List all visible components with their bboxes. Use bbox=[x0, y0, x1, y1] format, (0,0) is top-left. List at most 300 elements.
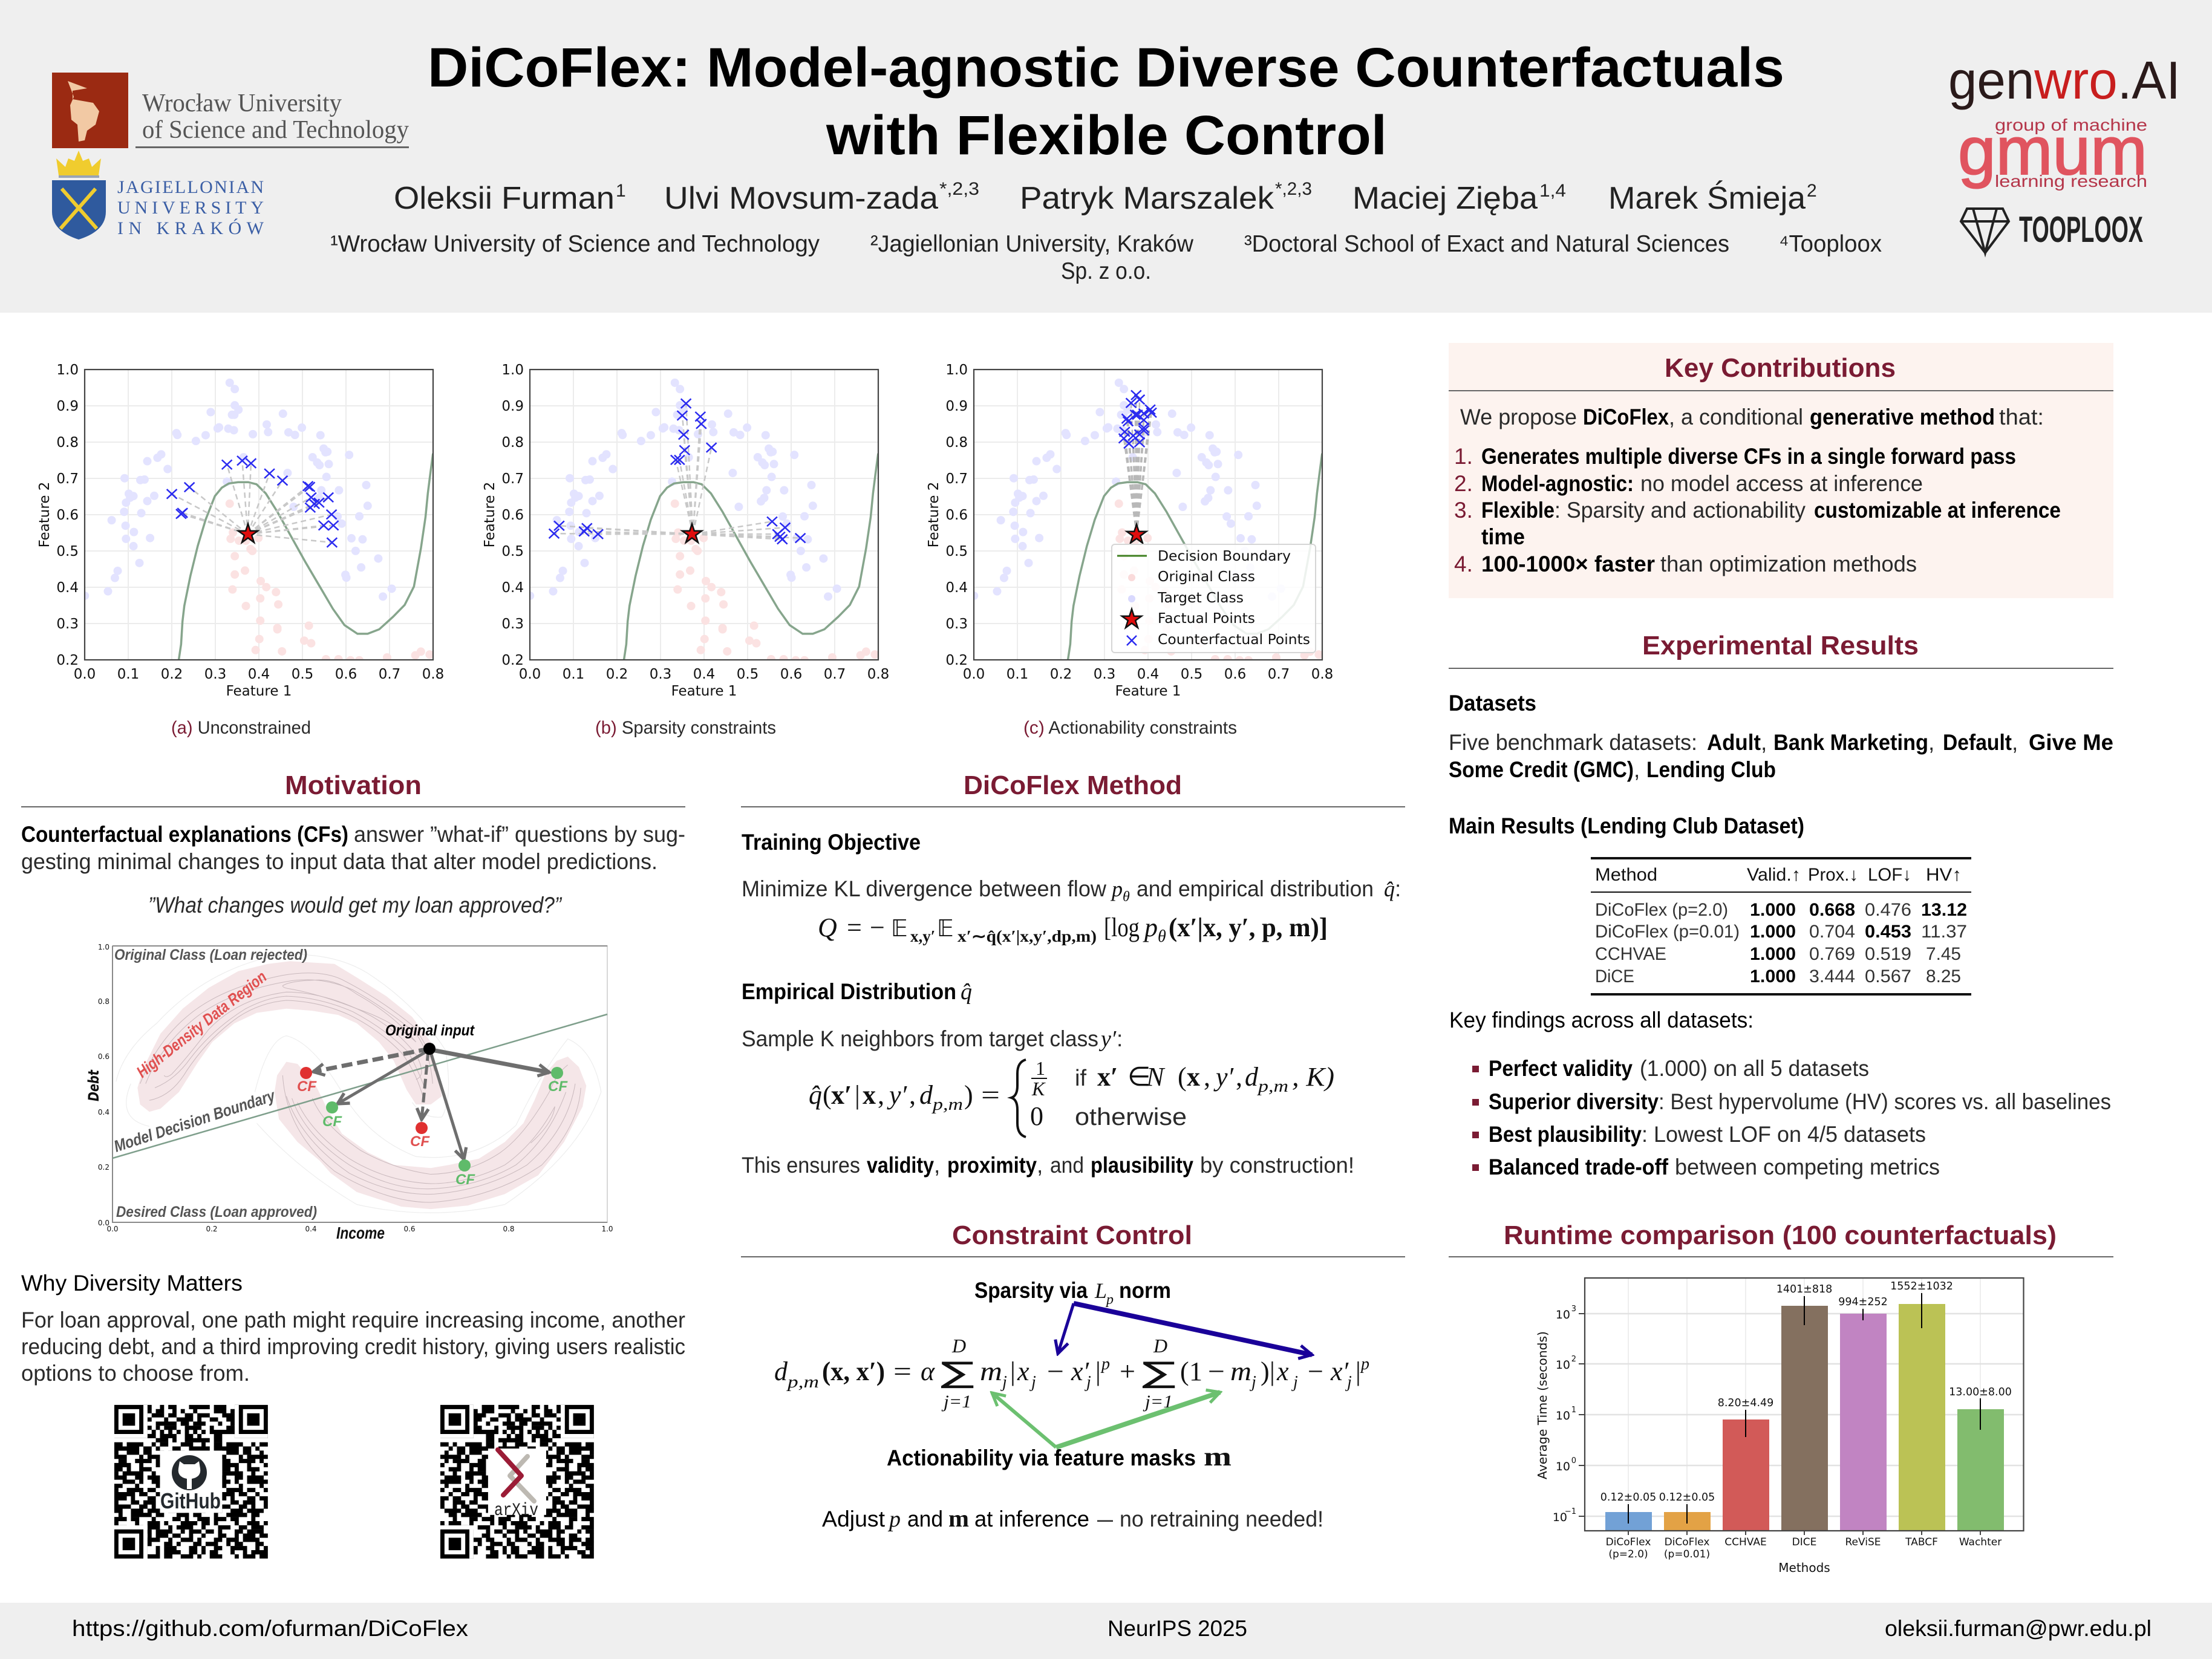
heading: runtime comparison: Runtime comparison (100 counterfactuals) bbox=[1504, 1221, 2057, 1250]
equation: empirical distribution: p,m bbox=[1257, 1077, 1288, 1096]
text block: ensures: This ensures bbox=[742, 1153, 860, 1178]
equation: objective: 𝔼 bbox=[891, 915, 908, 942]
figure: scatter plot (a) unconstrained: 1.0 bbox=[56, 362, 79, 378]
equation: distance: p bbox=[1360, 1355, 1369, 1374]
heading: experimental results: Experimental Results bbox=[1642, 631, 1919, 660]
arrows: sparsity bbox=[1058, 1303, 1312, 1355]
equation: empirical distribution: x bbox=[863, 1080, 876, 1110]
text block: ensures: validity bbox=[867, 1153, 934, 1178]
category labels: ReViSE bbox=[1845, 1536, 1881, 1548]
text block: we propose: DiCoFlex bbox=[1583, 405, 1669, 429]
equation: empirical distribution: d bbox=[1245, 1062, 1259, 1092]
figure: loan decision illustration: Original input bbox=[385, 1022, 475, 1039]
figure: scatter plot (a) unconstrained: Feature 2 bbox=[37, 482, 53, 547]
figure: loan decision illustration: Desired Class (Loan approved) bbox=[116, 1204, 317, 1221]
results table: Method bbox=[1595, 865, 1657, 885]
figure: loan decision illustration: 0.4 bbox=[98, 1108, 109, 1116]
text block: we propose: that: bbox=[1999, 405, 2044, 429]
equation: distance: x′ bbox=[1071, 1357, 1090, 1386]
axis tick labels (b): 0.4 bbox=[693, 667, 715, 682]
equation: empirical distribution: N bbox=[1146, 1062, 1166, 1092]
equation: empirical distribution: d bbox=[919, 1080, 933, 1110]
bar chart: average time: 10 bbox=[1553, 1511, 1567, 1524]
text block: adjust at inference: Adjust bbox=[822, 1507, 886, 1531]
text block: CF definition: Counterfactual explanations (CFs) bbox=[21, 822, 348, 847]
text block: datasets: Lending Club bbox=[1646, 757, 1776, 782]
category labels: Wachter bbox=[1959, 1536, 2002, 1548]
bullet list: findings: Best plausibility bbox=[1489, 1122, 1642, 1147]
bar chart: average time: 3 bbox=[1571, 1305, 1576, 1314]
equation: objective: θ bbox=[1158, 927, 1166, 946]
figure: loan decision illustration: 0.8 bbox=[98, 997, 109, 1006]
equation: distance: j=1 bbox=[941, 1392, 971, 1412]
numbered list: than optimization methods bbox=[1660, 552, 1917, 576]
logo: Jagiellonian University: JAGIELLONIAN bbox=[117, 177, 264, 197]
category labels: DICE bbox=[1792, 1536, 1816, 1548]
figure: scatter plot (a) unconstrained bbox=[37, 362, 444, 699]
figure: loan decision illustration: High-Density Data Region bbox=[133, 968, 270, 1081]
bar chart: average time: 0 bbox=[1571, 1456, 1576, 1465]
logo: gmum: gmum bbox=[1958, 113, 2147, 189]
axis tick labels (c): 0.8 bbox=[1311, 667, 1333, 682]
axis tick labels (c): 0.6 bbox=[1224, 667, 1246, 682]
equation: distance: j bbox=[1000, 1373, 1007, 1392]
label: sparsity: L bbox=[1094, 1279, 1107, 1303]
QR code: GitHub: GitHub bbox=[160, 1488, 221, 1513]
figure: loan decision illustration: Debt bbox=[85, 1069, 102, 1101]
axis labels: Methods bbox=[1778, 1560, 1830, 1575]
axis tick labels (a): 0.6 bbox=[335, 667, 357, 682]
text block: ensures: plausibility bbox=[1091, 1153, 1193, 1178]
results table: 0.769 bbox=[1809, 944, 1855, 964]
footer band: https://github.com/ofurman/DiCoFlex bbox=[72, 1616, 469, 1641]
annotations: Original Class (Loan rejected) bbox=[114, 947, 307, 963]
subheading: training objective: Training Objective bbox=[742, 830, 921, 855]
axis tick labels (b): 0.5 bbox=[737, 667, 759, 682]
figure: loan decision illustration: CF bbox=[455, 1172, 475, 1188]
figure: loan decision illustration bbox=[85, 943, 613, 1242]
counterfactual links and points (b) bbox=[549, 399, 806, 544]
points and CF labels bbox=[423, 1043, 436, 1055]
figure: loan decision illustration: CF bbox=[410, 1133, 430, 1150]
authors: 1 bbox=[616, 181, 626, 201]
text block: sample neighbors: Sample K neighbors from target class bbox=[742, 1026, 1098, 1051]
title: with Flexible Control bbox=[826, 105, 1387, 166]
caption (a): (a) Unconstrained bbox=[171, 718, 311, 738]
results table: 8.25 bbox=[1926, 966, 1961, 986]
category labels: CCHVAE bbox=[1724, 1536, 1767, 1548]
numbered list: 4. bbox=[1454, 552, 1473, 576]
figure: loan decision illustration: CF bbox=[548, 1078, 568, 1095]
equation: empirical distribution: ( bbox=[823, 1080, 832, 1110]
title bbox=[428, 37, 1784, 166]
affiliations: ³Doctoral School of Exact and Natural Sciences bbox=[1244, 231, 1729, 257]
results table: 13.12 bbox=[1921, 900, 1967, 920]
bullet list: findings: (1.000) on all 5 datasets bbox=[1640, 1056, 1869, 1081]
text block: adjust at inference: m bbox=[948, 1505, 969, 1532]
QR code: GitHub bbox=[114, 1405, 268, 1559]
text block: KL divergence: p bbox=[1110, 877, 1123, 901]
figure: scatter plot (c) actionability constraints bbox=[926, 362, 1333, 699]
figure: loan decision illustration: Model Decision Boundary bbox=[112, 1086, 278, 1156]
figure: loan decision illustration: Income bbox=[336, 1224, 385, 1242]
equation: empirical distribution bbox=[809, 1057, 1334, 1137]
footer band: oleksii.furman@pwr.edu.pl bbox=[1885, 1616, 2152, 1641]
results table: 0.476 bbox=[1865, 900, 1911, 920]
results table: Prox.↓ bbox=[1808, 865, 1858, 885]
logo: Tooploox bbox=[1961, 209, 2143, 253]
figure: scatter plot (b) sparsity constraints: 0.7 bbox=[501, 471, 524, 487]
authors: Patryk Marszalek bbox=[1020, 181, 1274, 216]
numbered list bbox=[1454, 444, 2061, 576]
subheading: datasets: Datasets bbox=[1449, 691, 1536, 715]
axis tick labels (a): 0.7 bbox=[379, 667, 400, 682]
logo: Wroclaw University of Science and Technology: Wrocław University bbox=[142, 90, 342, 117]
logo: Wroclaw University of Science and Technology bbox=[52, 73, 409, 148]
logo: Jagiellonian University: IN KRAKÓW bbox=[117, 218, 264, 238]
figure: scatter plot (a) unconstrained: 0.8 bbox=[56, 435, 79, 451]
figure: scatter plot (b) sparsity constraints: 0.3 bbox=[501, 616, 524, 632]
footer band bbox=[0, 1603, 2212, 1659]
text block: KL divergence: θ bbox=[1123, 889, 1130, 905]
equation: objective: p bbox=[1143, 913, 1158, 942]
title: DiCoFlex: Model-agnostic Diverse Counterfactuals bbox=[428, 37, 1784, 99]
figure: scatter plot (b) sparsity constraints: Feature 1 bbox=[671, 683, 737, 699]
equation: distance: | bbox=[1356, 1357, 1361, 1386]
heading: motivation: Motivation bbox=[285, 771, 422, 800]
bars bbox=[1605, 1304, 2004, 1531]
axis tick labels (a): 0.4 bbox=[248, 667, 270, 682]
equation: distance: m bbox=[1230, 1357, 1251, 1386]
axis tick labels (a): 0.8 bbox=[422, 667, 444, 682]
bar chart: average time: 2 bbox=[1571, 1355, 1576, 1364]
results table: 0.704 bbox=[1809, 922, 1855, 942]
figure: scatter plot (b) sparsity constraints: Feature 2 bbox=[482, 482, 498, 547]
equation: distance: j bbox=[1291, 1373, 1298, 1392]
equation: empirical distribution: , bbox=[909, 1080, 916, 1110]
results table: 0.567 bbox=[1865, 966, 1911, 986]
authors: Ulvi Movsum-zada bbox=[664, 181, 938, 216]
equation: distance: p,m bbox=[786, 1373, 819, 1392]
axis tick labels (a): 0.1 bbox=[117, 667, 139, 682]
equation: distance: ( bbox=[1180, 1357, 1189, 1386]
equation: distance: p bbox=[1100, 1355, 1110, 1374]
figure: scatter plot (a) unconstrained: 0.6 bbox=[56, 507, 79, 523]
axis tick labels (b): 0.1 bbox=[563, 667, 584, 682]
quote: ”What changes would get my loan approved?” bbox=[148, 893, 563, 918]
heading: key contributions: Key Contributions bbox=[1665, 353, 1896, 383]
numbered list: 100-1000× faster bbox=[1481, 552, 1655, 576]
figure: loan decision illustration: 0.2 bbox=[98, 1163, 109, 1172]
logo: Jagiellonian University bbox=[52, 151, 264, 240]
text block: datasets: , bbox=[1928, 730, 1934, 755]
equation: distance: x bbox=[1017, 1357, 1029, 1386]
tick labels: 0.6 bbox=[403, 1225, 416, 1233]
equation: empirical distribution: , K) bbox=[1292, 1062, 1334, 1092]
category labels: DiCoFlex bbox=[1606, 1536, 1651, 1548]
equation: empirical distribution: ( bbox=[1178, 1062, 1187, 1092]
arrows from original input bbox=[313, 1049, 549, 1159]
tick labels: 0.4 bbox=[305, 1225, 317, 1233]
counterfactual links and points (c) bbox=[1119, 390, 1157, 535]
panel: experimental results bbox=[1449, 631, 2113, 1179]
equation: empirical distribution: x′ bbox=[831, 1080, 852, 1110]
equation: distance: D bbox=[1153, 1335, 1167, 1357]
text block: diversity: options to choose from. bbox=[21, 1361, 250, 1386]
results table: 0.668 bbox=[1809, 900, 1855, 920]
text block: ensures: , bbox=[1037, 1153, 1043, 1178]
equation: distance: + bbox=[1120, 1357, 1135, 1386]
figure: scatter plot (c) actionability constraints: 0.9 bbox=[945, 399, 968, 414]
caption (c): (c) Actionability constraints bbox=[1023, 718, 1237, 738]
figure: scatter plot (b) sparsity constraints: 0.4 bbox=[501, 580, 524, 596]
numbered list: customizable at inference bbox=[1814, 498, 2061, 523]
numbered list: Model-agnostic: bbox=[1481, 471, 1634, 496]
text block: KL divergence: : bbox=[1395, 876, 1401, 901]
text block: datasets: , bbox=[1634, 757, 1640, 782]
figure: scatter plot (c) actionability constraints: 0.4 bbox=[945, 580, 968, 596]
results table: Valid.↑ bbox=[1747, 865, 1801, 885]
heading: method: DiCoFlex Method bbox=[964, 771, 1182, 800]
equation: empirical distribution: , bbox=[1204, 1062, 1210, 1092]
category labels: (p=2.0) bbox=[1608, 1548, 1648, 1560]
numbered list: time bbox=[1481, 524, 1525, 549]
value labels: 8.20±4.49 bbox=[1718, 1397, 1773, 1409]
legend bbox=[1112, 544, 1316, 653]
bar chart: average time: 10 bbox=[1556, 1308, 1570, 1322]
bar chart: average time: 10 bbox=[1556, 1460, 1570, 1473]
authors: Maciej Zięba bbox=[1352, 181, 1538, 216]
authors: 1,4 bbox=[1539, 181, 1566, 201]
text block: datasets: Bank Marketing bbox=[1773, 730, 1928, 755]
footer band: NeurIPS 2025 bbox=[1108, 1616, 1247, 1641]
text block: adjust at inference: at inference bbox=[974, 1507, 1089, 1531]
text block: sample neighbors: : bbox=[1117, 1026, 1123, 1051]
numbered list: Generates multiple diverse CFs in a single forward pass bbox=[1481, 444, 2016, 469]
equation: objective: Q bbox=[818, 913, 837, 942]
text block: sample neighbors: y′ bbox=[1098, 1026, 1117, 1052]
equation: distance: | bbox=[1270, 1357, 1275, 1386]
panel: DiCoFlex method bbox=[741, 771, 1405, 1178]
equation: distance: α bbox=[921, 1357, 935, 1386]
equation: empirical distribution: | bbox=[855, 1080, 860, 1110]
subheading: empirical distribution: q̂ bbox=[961, 979, 972, 1005]
text block: datasets: Some Credit (GMC) bbox=[1449, 757, 1634, 782]
equation: empirical distribution: 0 bbox=[1030, 1101, 1043, 1131]
label: sparsity: p bbox=[1105, 1292, 1114, 1308]
axis tick labels (c): 0.0 bbox=[963, 667, 985, 682]
figure: loan decision illustration: 1.0 bbox=[98, 943, 109, 951]
figure: scatter plot (a) unconstrained: 0.5 bbox=[56, 544, 79, 559]
caption (b): (b) Sparsity constraints bbox=[595, 718, 776, 738]
figure: scatter plot (c) actionability constraints: 1.0 bbox=[945, 362, 968, 378]
text block: KL divergence: Minimize KL divergence between flow bbox=[742, 876, 1106, 901]
results table: HV↑ bbox=[1926, 865, 1962, 885]
numbered list: 3. bbox=[1454, 498, 1473, 523]
text block: ensures: proximity bbox=[947, 1153, 1037, 1178]
text block: diversity: For loan approval, one path might require increasing income, another bbox=[21, 1308, 685, 1332]
axis tick labels (c): 0.7 bbox=[1268, 667, 1290, 682]
label: sparsity: Sparsity via bbox=[974, 1278, 1088, 1303]
category labels: (p=0.01) bbox=[1664, 1548, 1710, 1560]
results table: 1.000 bbox=[1750, 966, 1796, 986]
equation: empirical distribution: 1 bbox=[1036, 1057, 1045, 1079]
equation: distance: x bbox=[1276, 1357, 1289, 1386]
authors: 2 bbox=[1807, 181, 1817, 201]
authors: *,2,3 bbox=[1275, 179, 1312, 199]
affiliations: ⁴Tooploox bbox=[1779, 231, 1882, 257]
axis tick labels (c): 0.2 bbox=[1050, 667, 1072, 682]
equation: objective: [log bbox=[1104, 913, 1140, 942]
label: actionability: m bbox=[1204, 1442, 1232, 1472]
authors: Marek Śmieja bbox=[1608, 180, 1806, 216]
arrows: actionability bbox=[992, 1392, 1220, 1447]
figure: scatter plot (c) actionability constraints: Feature 2 bbox=[926, 482, 942, 547]
results table: 7.45 bbox=[1926, 944, 1961, 964]
equation: distance: j bbox=[1345, 1373, 1352, 1392]
bullet list: findings: : Lowest LOF on 4/5 datasets bbox=[1642, 1122, 1926, 1147]
text block: adjust at inference: — bbox=[1097, 1507, 1113, 1531]
figure: scatter plot (a) unconstrained: 0.3 bbox=[56, 616, 79, 632]
text block: datasets: Five benchmark datasets: bbox=[1449, 730, 1697, 755]
value labels: 1552±1032 bbox=[1890, 1280, 1953, 1292]
text block: datasets: Default bbox=[1943, 730, 2012, 755]
figure: scatter plot (a) unconstrained: 0.9 bbox=[56, 399, 79, 414]
equation: distance: − bbox=[1208, 1357, 1225, 1386]
equation: distance: | bbox=[1010, 1357, 1016, 1386]
figure: scatter plot (c) actionability constraints: 0.7 bbox=[945, 471, 968, 487]
authors: *,2,3 bbox=[939, 179, 979, 199]
panel: key contributions bbox=[1449, 343, 2113, 598]
tick labels: 0.8 bbox=[503, 1225, 515, 1233]
figure: scatter plot (b) sparsity constraints: 0.9 bbox=[501, 399, 524, 414]
axis tick labels (b): 0.7 bbox=[824, 667, 846, 682]
bar chart: average time: 1 bbox=[1571, 1406, 1576, 1415]
bar chart: average time: −1 bbox=[1565, 1507, 1576, 1516]
bullet list: findings: Perfect validity bbox=[1489, 1056, 1633, 1081]
error bars bbox=[1628, 1293, 1980, 1524]
equation: distance: = bbox=[893, 1357, 912, 1386]
affiliations bbox=[330, 231, 1882, 284]
tick labels: 1.0 bbox=[601, 1225, 613, 1233]
equation: distance: j bbox=[1029, 1373, 1036, 1392]
panel: motivation bbox=[21, 771, 685, 1559]
subheading: empirical distribution: Empirical Distribution bbox=[742, 979, 956, 1004]
figure: scatter plot (b) sparsity constraints: 1.0 bbox=[501, 362, 524, 378]
equation: distance: (x, x′) bbox=[822, 1357, 885, 1386]
text block: we propose: generative method bbox=[1810, 405, 1995, 429]
logo: gmum: group of machine bbox=[1995, 116, 2147, 134]
results table: 11.37 bbox=[1921, 922, 1967, 942]
figure: scatter plot (c) actionability constraints: 0.3 bbox=[945, 616, 968, 632]
figure: scatter plot (b) sparsity constraints: 0.6 bbox=[501, 507, 524, 523]
equation: empirical distribution: p,m bbox=[931, 1095, 963, 1114]
equation: distance: ∑ bbox=[1142, 1356, 1176, 1390]
equation: distance: j bbox=[1250, 1373, 1256, 1392]
bullet list: findings: between competing metrics bbox=[1675, 1155, 1940, 1179]
results table: CCHVAE bbox=[1595, 944, 1666, 964]
equation: distance bbox=[774, 1335, 1369, 1412]
value labels: 0.12±0.05 bbox=[1659, 1491, 1715, 1504]
text block: datasets: , bbox=[1761, 730, 1767, 755]
legend: Counterfactual Points bbox=[1158, 632, 1310, 648]
equation: distance: 1 bbox=[1189, 1357, 1202, 1386]
legend: Factual Points bbox=[1158, 611, 1255, 627]
equation: empirical distribution: otherwise bbox=[1075, 1104, 1187, 1130]
axis tick labels (b): 0.3 bbox=[650, 667, 671, 682]
figure: scatter plot (b) sparsity constraints bbox=[482, 362, 889, 699]
figure: scatter plot (c) actionability constraints: 0.8 bbox=[945, 435, 968, 451]
text block: adjust at inference: p bbox=[887, 1507, 901, 1532]
results table bbox=[1591, 857, 1971, 996]
equation: objective: − bbox=[870, 913, 885, 942]
figure: scatter plot (c) actionability constraints: 0.2 bbox=[945, 653, 968, 668]
bullet list: findings bbox=[1472, 1056, 2111, 1179]
authors bbox=[394, 179, 1817, 216]
results table: 0.519 bbox=[1865, 944, 1911, 964]
text block: KL divergence: and empirical distribution bbox=[1137, 876, 1374, 901]
logo: genwro.AI: genwro.AI bbox=[1948, 50, 2181, 110]
axis tick labels (b): 0.8 bbox=[867, 667, 889, 682]
bar chart: average time: 10 bbox=[1556, 1358, 1570, 1372]
figure: scatter plot (b) sparsity constraints: 0.8 bbox=[501, 435, 524, 451]
equation: empirical distribution: y′ bbox=[887, 1080, 908, 1110]
category labels: DiCoFlex bbox=[1665, 1536, 1709, 1548]
equation: empirical distribution: ) bbox=[964, 1080, 973, 1110]
axis tick labels (c): 0.4 bbox=[1137, 667, 1159, 682]
numbered list: : Sparsity and actionability bbox=[1555, 498, 1806, 523]
numbered list: no model access at inference bbox=[1640, 471, 1923, 496]
subheading: main results: Main Results (Lending Club Dataset) bbox=[1449, 813, 1804, 838]
equation: empirical distribution: y′ bbox=[1213, 1062, 1235, 1092]
bar chart: average time: 10 bbox=[1556, 1409, 1570, 1423]
affiliations: ²Jagiellonian University, Kraków bbox=[870, 231, 1194, 257]
axis tick labels (a): 0.0 bbox=[74, 667, 96, 682]
equation: objective: x′∼q̂(x′|x,y′,dp,m) bbox=[958, 927, 1097, 945]
value labels: 0.12±0.05 bbox=[1600, 1491, 1656, 1504]
text block: adjust at inference: and bbox=[907, 1507, 943, 1531]
results table: DiCoFlex (p=0.01) bbox=[1595, 922, 1740, 942]
numbered list: 1. bbox=[1454, 444, 1473, 469]
results table: 1.000 bbox=[1750, 922, 1796, 942]
affiliations: ¹Wrocław University of Science and Technology bbox=[330, 231, 820, 257]
text block: we propose: We propose bbox=[1460, 405, 1577, 429]
results table: 1.000 bbox=[1750, 900, 1796, 920]
equation: distance: | bbox=[1095, 1357, 1101, 1386]
text block: diversity: reducing debt, and a third improving credit history, giving users realistic bbox=[21, 1334, 685, 1359]
QR code: arXiv bbox=[440, 1405, 594, 1559]
figure: loan decision illustration: CF bbox=[297, 1078, 317, 1095]
results table: 0.453 bbox=[1865, 922, 1911, 942]
axis tick labels (b): 0.6 bbox=[780, 667, 802, 682]
equation: distance: x′ bbox=[1330, 1357, 1349, 1386]
figure: scatter plot (c) actionability constraints: Feature 1 bbox=[1115, 683, 1181, 699]
label: sparsity: norm bbox=[1119, 1278, 1171, 1303]
equation: empirical distribution: , bbox=[878, 1080, 884, 1110]
affiliations: Sp. z o.o. bbox=[1061, 258, 1151, 284]
value labels: 994±252 bbox=[1838, 1296, 1888, 1308]
axis tick labels (c): 0.5 bbox=[1181, 667, 1202, 682]
bullet list: findings: : Best hypervolume (HV) scores vs. all baselines bbox=[1659, 1089, 2111, 1114]
logo: Jagiellonian University: UNIVERSITY bbox=[117, 198, 264, 218]
equation: distance: ) bbox=[1261, 1357, 1270, 1386]
equation: distance: − bbox=[1308, 1357, 1323, 1386]
equation: objective: 𝔼 bbox=[937, 915, 954, 942]
text block: datasets: , bbox=[2012, 730, 2018, 755]
axis tick labels (b): 0.0 bbox=[519, 667, 541, 682]
equation: empirical distribution: if bbox=[1075, 1066, 1086, 1091]
text block: we propose: , a conditional bbox=[1669, 405, 1803, 429]
